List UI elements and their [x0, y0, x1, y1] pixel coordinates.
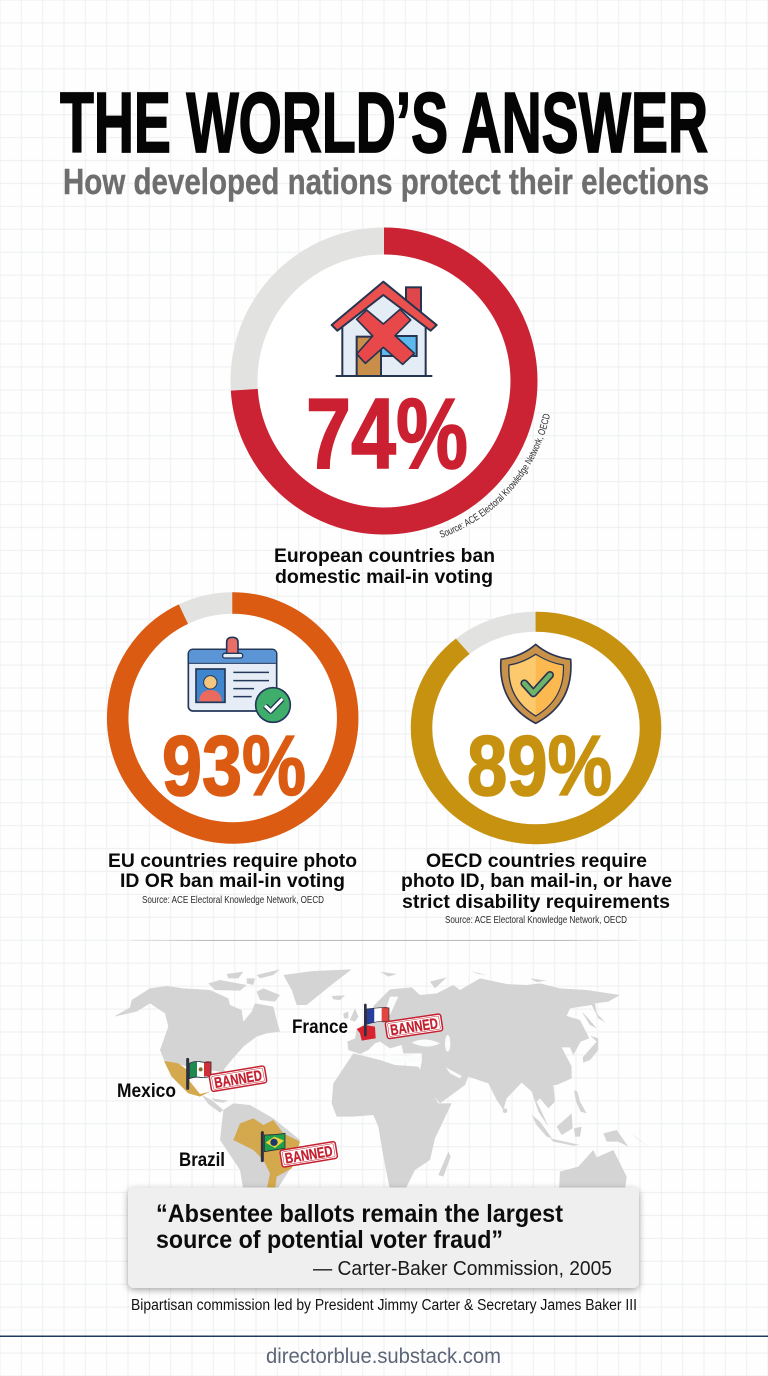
value: 74%: 74% [306, 378, 468, 490]
value: 93%: 93% [162, 719, 306, 814]
value: 89%: 89% [467, 719, 612, 814]
curved source note: Source: ACE Electoral Knowledge Network, OECD [440, 414, 550, 538]
callout: Carter-Baker quote [128, 1188, 639, 1288]
quote text [156, 1200, 564, 1254]
source note: Source: ACE Electoral Knowledge Network, OECD [142, 894, 324, 906]
donut chart: 93% [118, 603, 348, 833]
panel: 93 percent EU countries [108, 603, 357, 906]
map: Americas landmass [114, 969, 352, 1190]
footer URL: directorblue.substack.com [266, 1345, 501, 1368]
caption [274, 546, 495, 588]
region: France highlighted [357, 1025, 376, 1041]
region: Brazil highlighted [233, 1118, 300, 1190]
caption [401, 851, 672, 913]
caption: ID OR ban mail-in voting [120, 871, 345, 892]
quote text: “Absentee ballots remain the largest [156, 1200, 564, 1228]
map: Eurasia, Africa and Oceania [332, 971, 648, 1190]
attribution: — Carter-Baker Commission, 2005 [313, 1258, 612, 1280]
source note: Source: ACE Electoral Knowledge Network, OECD [445, 914, 627, 926]
note: commission description: Bipartisan commission led by President Jimmy Carter & Secretary James Baker III [131, 1297, 637, 1314]
world map with banned countries [114, 969, 648, 1190]
label: Mexico: Mexico [117, 1081, 176, 1102]
region: Mexico highlighted [164, 1061, 210, 1097]
label: France: France [292, 1017, 348, 1038]
stamp: France banned: BANNED [389, 1015, 439, 1039]
label: Brazil: Brazil [179, 1150, 225, 1171]
donut chart: 89% [422, 622, 650, 834]
caption: strict disability requirements [402, 892, 670, 913]
icon: photo ID with check [188, 637, 290, 722]
quote text: source of potential voter fraud” [156, 1226, 503, 1254]
flag: Mexico [188, 1059, 211, 1088]
flag: France [365, 1005, 389, 1035]
donut chart: 74% [244, 241, 524, 521]
flag: Brazil [262, 1133, 285, 1161]
icon: shield with check [501, 644, 571, 723]
icon: house with red cross [332, 282, 437, 376]
stamp: Mexico banned: BANNED [213, 1067, 263, 1092]
caption: EU countries require photo [108, 851, 357, 872]
stamp: Brazil banned: BANNED [284, 1143, 334, 1168]
caption: domestic mail-in voting [275, 567, 493, 588]
caption [108, 851, 357, 892]
caption: OECD countries require [426, 851, 647, 872]
caption: European countries ban [274, 546, 495, 567]
caption: photo ID, ban mail-in, or have [401, 871, 672, 892]
panel: 74 percent European countries [230, 228, 550, 588]
panel: 89 percent OECD countries [401, 622, 672, 926]
